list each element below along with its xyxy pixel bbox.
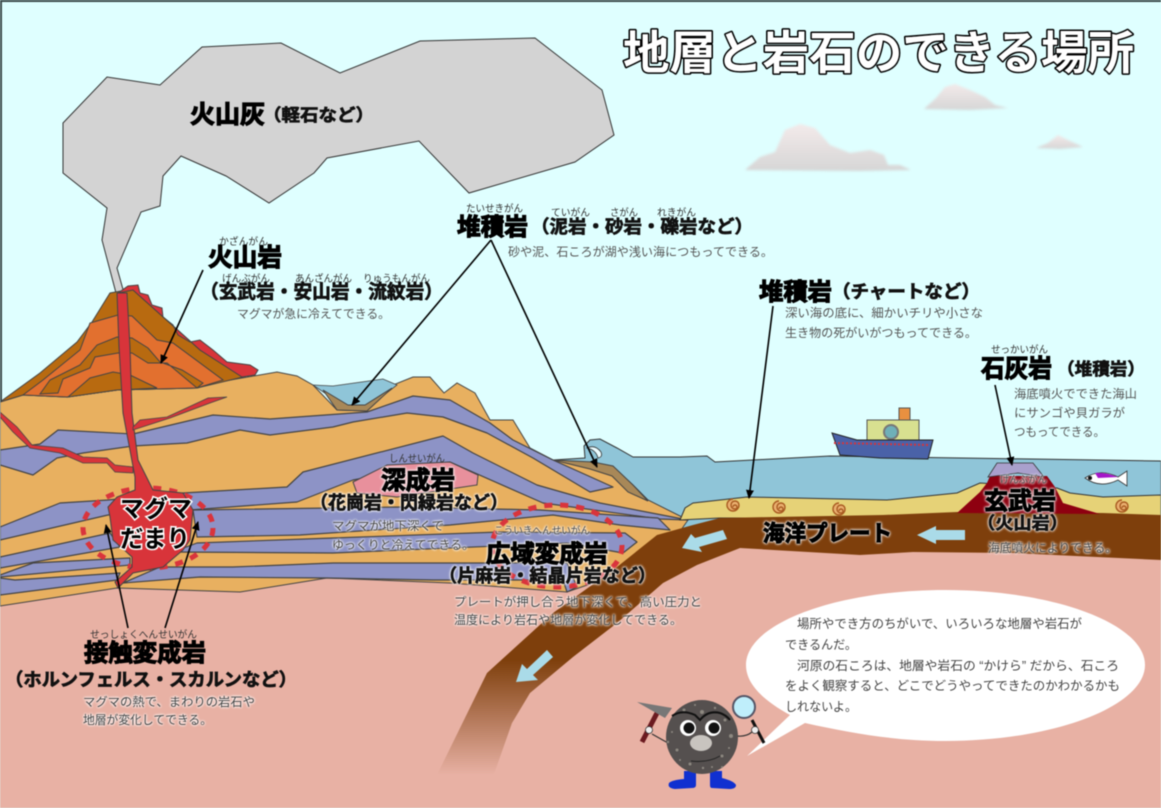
plutonic rock label xyxy=(310,452,508,552)
regional metamorphic rock label: 広域変成岩 xyxy=(486,541,608,568)
speech bubble: をよく観察すると、どこでどうやってできたのかわかるかも xyxy=(785,679,1120,693)
sedimentary rock label (chert): 深い海の底に、細かいチリや小さな xyxy=(785,305,983,320)
basalt label: げんぶがん xyxy=(1000,473,1047,486)
oceanic plate xyxy=(437,512,1161,777)
clouds xyxy=(745,84,1083,171)
strata band D xyxy=(0,532,637,577)
lava flow xyxy=(118,285,258,377)
plutonic rock label: ゆっくりと冷えてできる。 xyxy=(332,538,474,552)
contact metamorphic rock label xyxy=(5,628,297,727)
plutonic rock label: （花崗岩・閃緑岩など） xyxy=(310,493,508,513)
mantle xyxy=(0,535,1161,808)
contact metamorphic rock label: マグマの熱で、まわりの岩石や xyxy=(83,694,255,709)
outer volcanic layer xyxy=(0,289,243,402)
lake sediment xyxy=(323,388,392,411)
volcanic rock label: マグマが急に冷えてできる。 xyxy=(237,306,390,321)
limestone label: 海底噴火でできた海山 xyxy=(1014,387,1137,401)
limestone label: 石灰岩 xyxy=(981,355,1052,383)
regional metamorphic rock label: 温度により岩石や地層が変化してできる。 xyxy=(454,612,682,627)
hammer xyxy=(637,702,672,742)
basalt label: 玄武岩 xyxy=(984,488,1056,515)
magma chamber label: マグマ xyxy=(120,495,192,523)
sedimentary rock label (land) xyxy=(457,202,773,259)
body xyxy=(666,700,738,774)
volcanic ash label: 火山灰 xyxy=(190,101,265,129)
lake xyxy=(313,379,397,407)
sedimentary rock label (land): たいせきがん xyxy=(466,202,523,215)
sea xyxy=(553,439,1161,530)
limestone cap xyxy=(988,463,1044,477)
title: 地層と岩石のできる場所 xyxy=(623,27,1134,79)
plate motion arrows xyxy=(516,526,965,682)
regional metamorphic rock label: こういきへんせいがん xyxy=(494,524,590,537)
basalt label xyxy=(977,473,1117,555)
eyes xyxy=(680,720,721,736)
eyebrows xyxy=(672,712,730,720)
sedimentary rock label (land): 砂や泥、石ころが湖や浅い海につもってできる。 xyxy=(508,244,773,259)
coastal sediment xyxy=(553,460,648,501)
ship xyxy=(832,408,933,459)
regional metamorphic rock label: （片麻岩・結晶片岩など） xyxy=(439,566,656,586)
magma chamber label xyxy=(120,495,192,553)
core brown layer xyxy=(68,372,157,397)
volcanic rock label: かざんがん xyxy=(219,235,268,248)
speech bubble: しれないよ。 xyxy=(785,700,857,714)
sedimentary rock label (chert): 生き物の死がいがつもってできる。 xyxy=(785,325,977,340)
speech bubble: 場所やでき方のちがいで、いろいろな地層や岩石が xyxy=(797,616,1082,631)
sedimentary rock label (land): ていがん xyxy=(551,206,590,219)
basalt seamount xyxy=(957,476,1100,514)
magma chamber and conduit xyxy=(108,293,193,588)
contact metamorphic rock label: 接触変成岩 xyxy=(84,640,206,667)
basalt label: 海底噴火によりできる。 xyxy=(988,541,1117,555)
nose xyxy=(690,735,712,751)
magnifying glass xyxy=(733,696,764,743)
second brown layer xyxy=(40,337,203,394)
volcanic ash label: （軽石など） xyxy=(263,106,374,125)
magma chamber label: だまり xyxy=(120,526,190,553)
arms xyxy=(652,732,752,743)
strata band B xyxy=(0,436,688,540)
mouth xyxy=(691,756,720,761)
plutonic rock label: 深成岩 xyxy=(381,467,455,495)
contact metamorphic rock label: 地層が変化してできる。 xyxy=(83,712,212,727)
contact metamorphic rock label: せっしょくへんせいがん xyxy=(90,628,197,641)
volcanic rock label: あんざんがん xyxy=(295,272,352,285)
strata band C xyxy=(0,507,670,568)
volcanic rock label: げんぶがん xyxy=(222,272,270,285)
sedimentary rock label (chert): 堆積岩 xyxy=(759,279,832,306)
limestone label xyxy=(981,343,1145,439)
leader arrows xyxy=(106,240,1012,628)
dashed ring: contact metamorphism xyxy=(83,488,213,568)
volcanic rock label: りゅうもんがん xyxy=(363,272,430,285)
speech bubble: 河原の石ころは、地層や岩石の “かけら” だから、石ころ xyxy=(797,658,1119,673)
pluton xyxy=(353,462,478,497)
sedimentary rock label (land): 堆積岩 xyxy=(457,214,528,241)
volcanic rock label xyxy=(200,235,443,321)
sedimentary rock label (land): さがん xyxy=(610,206,638,219)
sedimentary rock label (chert): （チャートなど） xyxy=(832,282,980,302)
speech bubble xyxy=(746,590,1145,756)
plutonic rock label: マグマが地下深くで xyxy=(332,518,444,533)
rock character mascot xyxy=(637,696,764,789)
regional metamorphic rock label xyxy=(439,524,702,627)
regional metamorphic rock label: プレートが押し合う地下深くで、高い圧力と xyxy=(454,594,702,609)
oceanic sediment xyxy=(680,483,1161,520)
volcanic rock label: 火山岩 xyxy=(208,244,282,272)
sedimentary rock label (land): れきがん xyxy=(657,206,696,219)
magma sills xyxy=(0,397,227,473)
strata band E xyxy=(0,563,577,595)
volcano xyxy=(0,285,258,402)
sedimentary rock label (land): （泥岩・砂岩・礫岩など） xyxy=(531,217,753,237)
boots xyxy=(669,771,736,789)
speech bubble: できるんだ。 xyxy=(785,638,857,652)
limestone label: つもってできる。 xyxy=(1014,425,1105,439)
volcanic ash label xyxy=(190,101,374,129)
orange volcanic layer xyxy=(23,315,223,397)
limestone label: （堆積岩） xyxy=(1057,360,1145,379)
speckles xyxy=(667,704,733,769)
fish xyxy=(1085,471,1127,486)
strata band A xyxy=(0,396,613,492)
wave curl xyxy=(587,447,602,458)
limestone label: にサンゴや貝ガラが xyxy=(1014,405,1125,420)
continental crust xyxy=(0,372,688,606)
limestone label: せっかいがん xyxy=(991,343,1048,356)
dashed ring: regional metamorphism xyxy=(492,505,622,587)
oceanic plate label: 海洋プレート xyxy=(763,521,892,546)
shells xyxy=(727,499,1128,515)
plutonic rock label: しんせいがん xyxy=(389,452,445,465)
sedimentary rock label (chert) xyxy=(759,279,983,340)
contact metamorphic rock label: （ホルンフェルス・スカルンなど） xyxy=(5,670,297,690)
volcanic ash plume xyxy=(63,38,614,293)
volcanic rock label: （玄武岩・安山岩・流紋岩） xyxy=(200,281,443,303)
basalt label: （火山岩） xyxy=(977,514,1068,533)
